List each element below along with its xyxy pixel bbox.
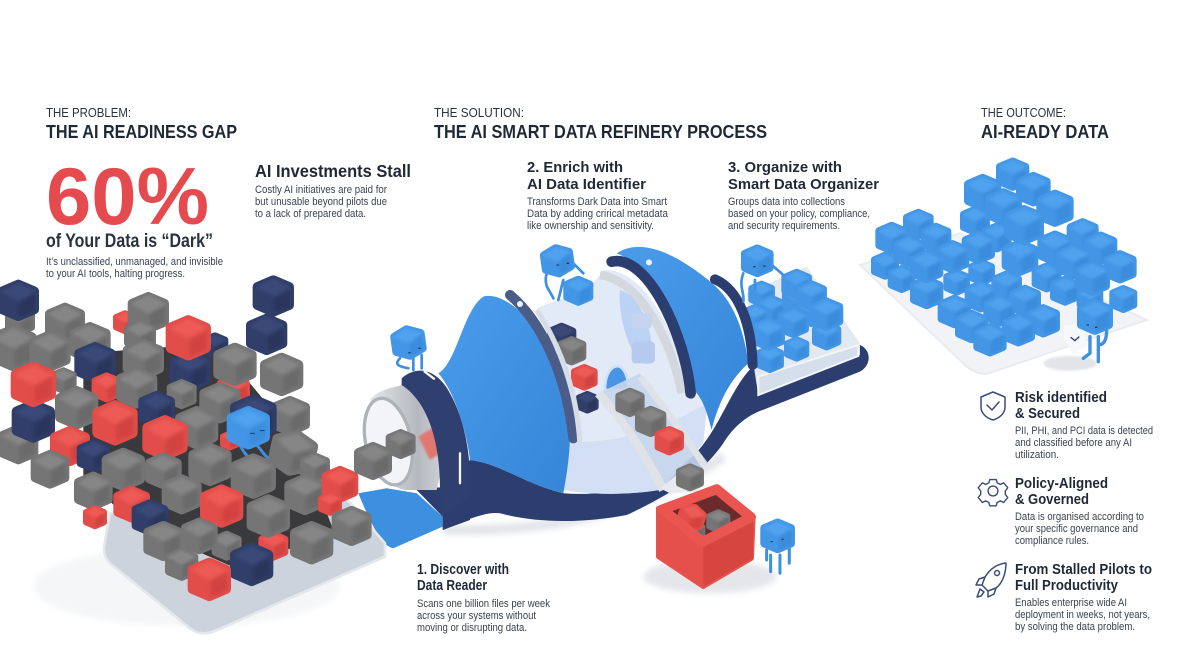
icon: shield bbox=[981, 392, 1005, 420]
benefit: policy aligned: & Governed bbox=[1015, 491, 1089, 508]
stray cubes bbox=[249, 278, 300, 392]
step 3: organize: 3. Organize with bbox=[728, 159, 842, 176]
step 3: organize bbox=[728, 159, 879, 232]
panel: the problem bbox=[46, 106, 411, 280]
benefit: policy aligned bbox=[1015, 475, 1144, 547]
panel: the outcome bbox=[976, 106, 1153, 633]
character: blue cube on intake collar bbox=[392, 326, 425, 370]
stack: front bbox=[940, 273, 1057, 354]
blue pad bbox=[358, 488, 443, 548]
step 2: enrich: Transforms Dark Data into Smart bbox=[527, 196, 667, 208]
right cone bbox=[617, 247, 748, 430]
benefit: from stalled pilots: deployment in weeks, not years, bbox=[1015, 609, 1150, 621]
benefit: risk identified: PII, PHI, and PCI data is detected bbox=[1015, 425, 1153, 437]
step 1: discover bbox=[417, 561, 550, 634]
stack: back bbox=[962, 160, 1071, 273]
red collection box bbox=[643, 487, 777, 593]
benefit: policy aligned: your specific governance and bbox=[1015, 523, 1138, 535]
heading: the outcome: AI-READY DATA bbox=[981, 122, 1109, 142]
benefit: from stalled pilots: Enables enterprise wide AI bbox=[1015, 597, 1127, 609]
benefit: from stalled pilots: by solving the data problem. bbox=[1015, 621, 1135, 633]
text block: AI investments stall: Costly AI initiatives are paid for bbox=[255, 184, 387, 196]
step 2: enrich bbox=[527, 159, 669, 232]
output tray with organized cubes bbox=[744, 267, 860, 395]
heading: the solution: THE AI SMART DATA REFINERY PROCESS bbox=[434, 122, 767, 142]
step 3: organize: based on your policy, compliance, bbox=[728, 208, 870, 220]
benefit: from stalled pilots: Full Productivity bbox=[1015, 577, 1119, 594]
illustration: refinery machine bbox=[357, 245, 869, 593]
intake glass tube bbox=[357, 380, 450, 490]
step 1: discover: 1. Discover with bbox=[417, 561, 509, 578]
benefit: risk identified: utilization. bbox=[1015, 449, 1059, 461]
step 1: discover: Data Reader bbox=[417, 577, 487, 594]
text block: AI investments stall bbox=[255, 161, 411, 220]
stack: right bbox=[1034, 221, 1135, 311]
glass tray bbox=[104, 483, 385, 633]
step 2: enrich: Data by adding crirical metadata bbox=[527, 208, 669, 220]
step 2: enrich: 2. Enrich with bbox=[527, 159, 623, 176]
character: blue cube beside box bbox=[763, 521, 792, 573]
big stat: 60%: 60% bbox=[46, 152, 209, 242]
text block: AI investments stall: AI Investments Stall bbox=[255, 161, 411, 181]
panel: the solution bbox=[417, 106, 879, 634]
heading: the outcome: THE OUTCOME: bbox=[981, 106, 1066, 120]
stat description bbox=[46, 256, 223, 280]
step 3: organize: Groups data into collections bbox=[728, 196, 845, 208]
benefit: risk identified bbox=[1015, 389, 1153, 461]
step 1: discover: across your systems without bbox=[417, 610, 536, 622]
character: blue cube sitting on pile bbox=[230, 409, 275, 465]
text block: AI investments stall: to a lack of prepared data. bbox=[255, 208, 366, 220]
heading: the problem bbox=[46, 106, 237, 142]
heading: the problem: THE AI READINESS GAP bbox=[46, 122, 237, 142]
stand bbox=[415, 460, 470, 530]
glass centre chamber bbox=[537, 270, 708, 494]
benefit: risk identified: and classified before any AI bbox=[1015, 437, 1132, 449]
heading: the problem: THE PROBLEM: bbox=[46, 106, 131, 120]
benefit: policy aligned: compliance rules. bbox=[1015, 535, 1089, 547]
stat description: to your AI tools, halting progress. bbox=[46, 268, 185, 280]
chute with cubes bbox=[598, 373, 708, 493]
stat description: It’s unclassified, unmanaged, and invisible bbox=[46, 256, 223, 268]
collar bbox=[402, 371, 470, 517]
machine base bbox=[443, 345, 869, 530]
icon: gear bbox=[978, 480, 1008, 506]
illustration: AI-ready data blocks on platform bbox=[860, 160, 1147, 374]
benefit: risk identified: & Secured bbox=[1015, 405, 1080, 422]
icon: rocket bbox=[976, 563, 1006, 597]
left cone bbox=[438, 296, 570, 493]
illustration: pile of dark data cubes bbox=[0, 278, 385, 633]
heading: the solution: THE SOLUTION: bbox=[434, 106, 524, 120]
benefit: from stalled pilots: From Stalled Pilots to bbox=[1015, 561, 1152, 578]
benefit: policy aligned: Data is organised according to bbox=[1015, 511, 1144, 523]
step 1: discover: Scans one billion files per week bbox=[417, 598, 550, 610]
heading: the solution bbox=[434, 106, 767, 142]
stack: left bbox=[873, 211, 993, 306]
step 3: organize: and security requirements. bbox=[728, 220, 840, 232]
text block: AI investments stall: but unusable beyond pilots due bbox=[255, 196, 387, 208]
stat caption: of Your Data is “Dark” bbox=[46, 231, 213, 252]
character: blue cube placing cube on chamber bbox=[541, 245, 591, 303]
character: blue cube holding shield sign bbox=[1043, 302, 1110, 371]
benefit: policy aligned: Policy-Aligned bbox=[1015, 475, 1108, 492]
benefit: from stalled pilots bbox=[1015, 561, 1152, 633]
heading: the outcome bbox=[981, 106, 1109, 142]
step 2: enrich: AI Data Identifier bbox=[527, 176, 646, 193]
step 1: discover: moving or disrupting data. bbox=[417, 622, 527, 634]
character: blue cube organizing tray bbox=[741, 247, 783, 302]
benefit: risk identified: Risk identified bbox=[1015, 389, 1107, 406]
step 3: organize: Smart Data Organizer bbox=[728, 176, 879, 193]
conveyor cube entering machine bbox=[357, 445, 389, 477]
step 2: enrich: like ownership and sensitivity. bbox=[527, 220, 654, 232]
cubes inside chamber bbox=[549, 325, 597, 412]
